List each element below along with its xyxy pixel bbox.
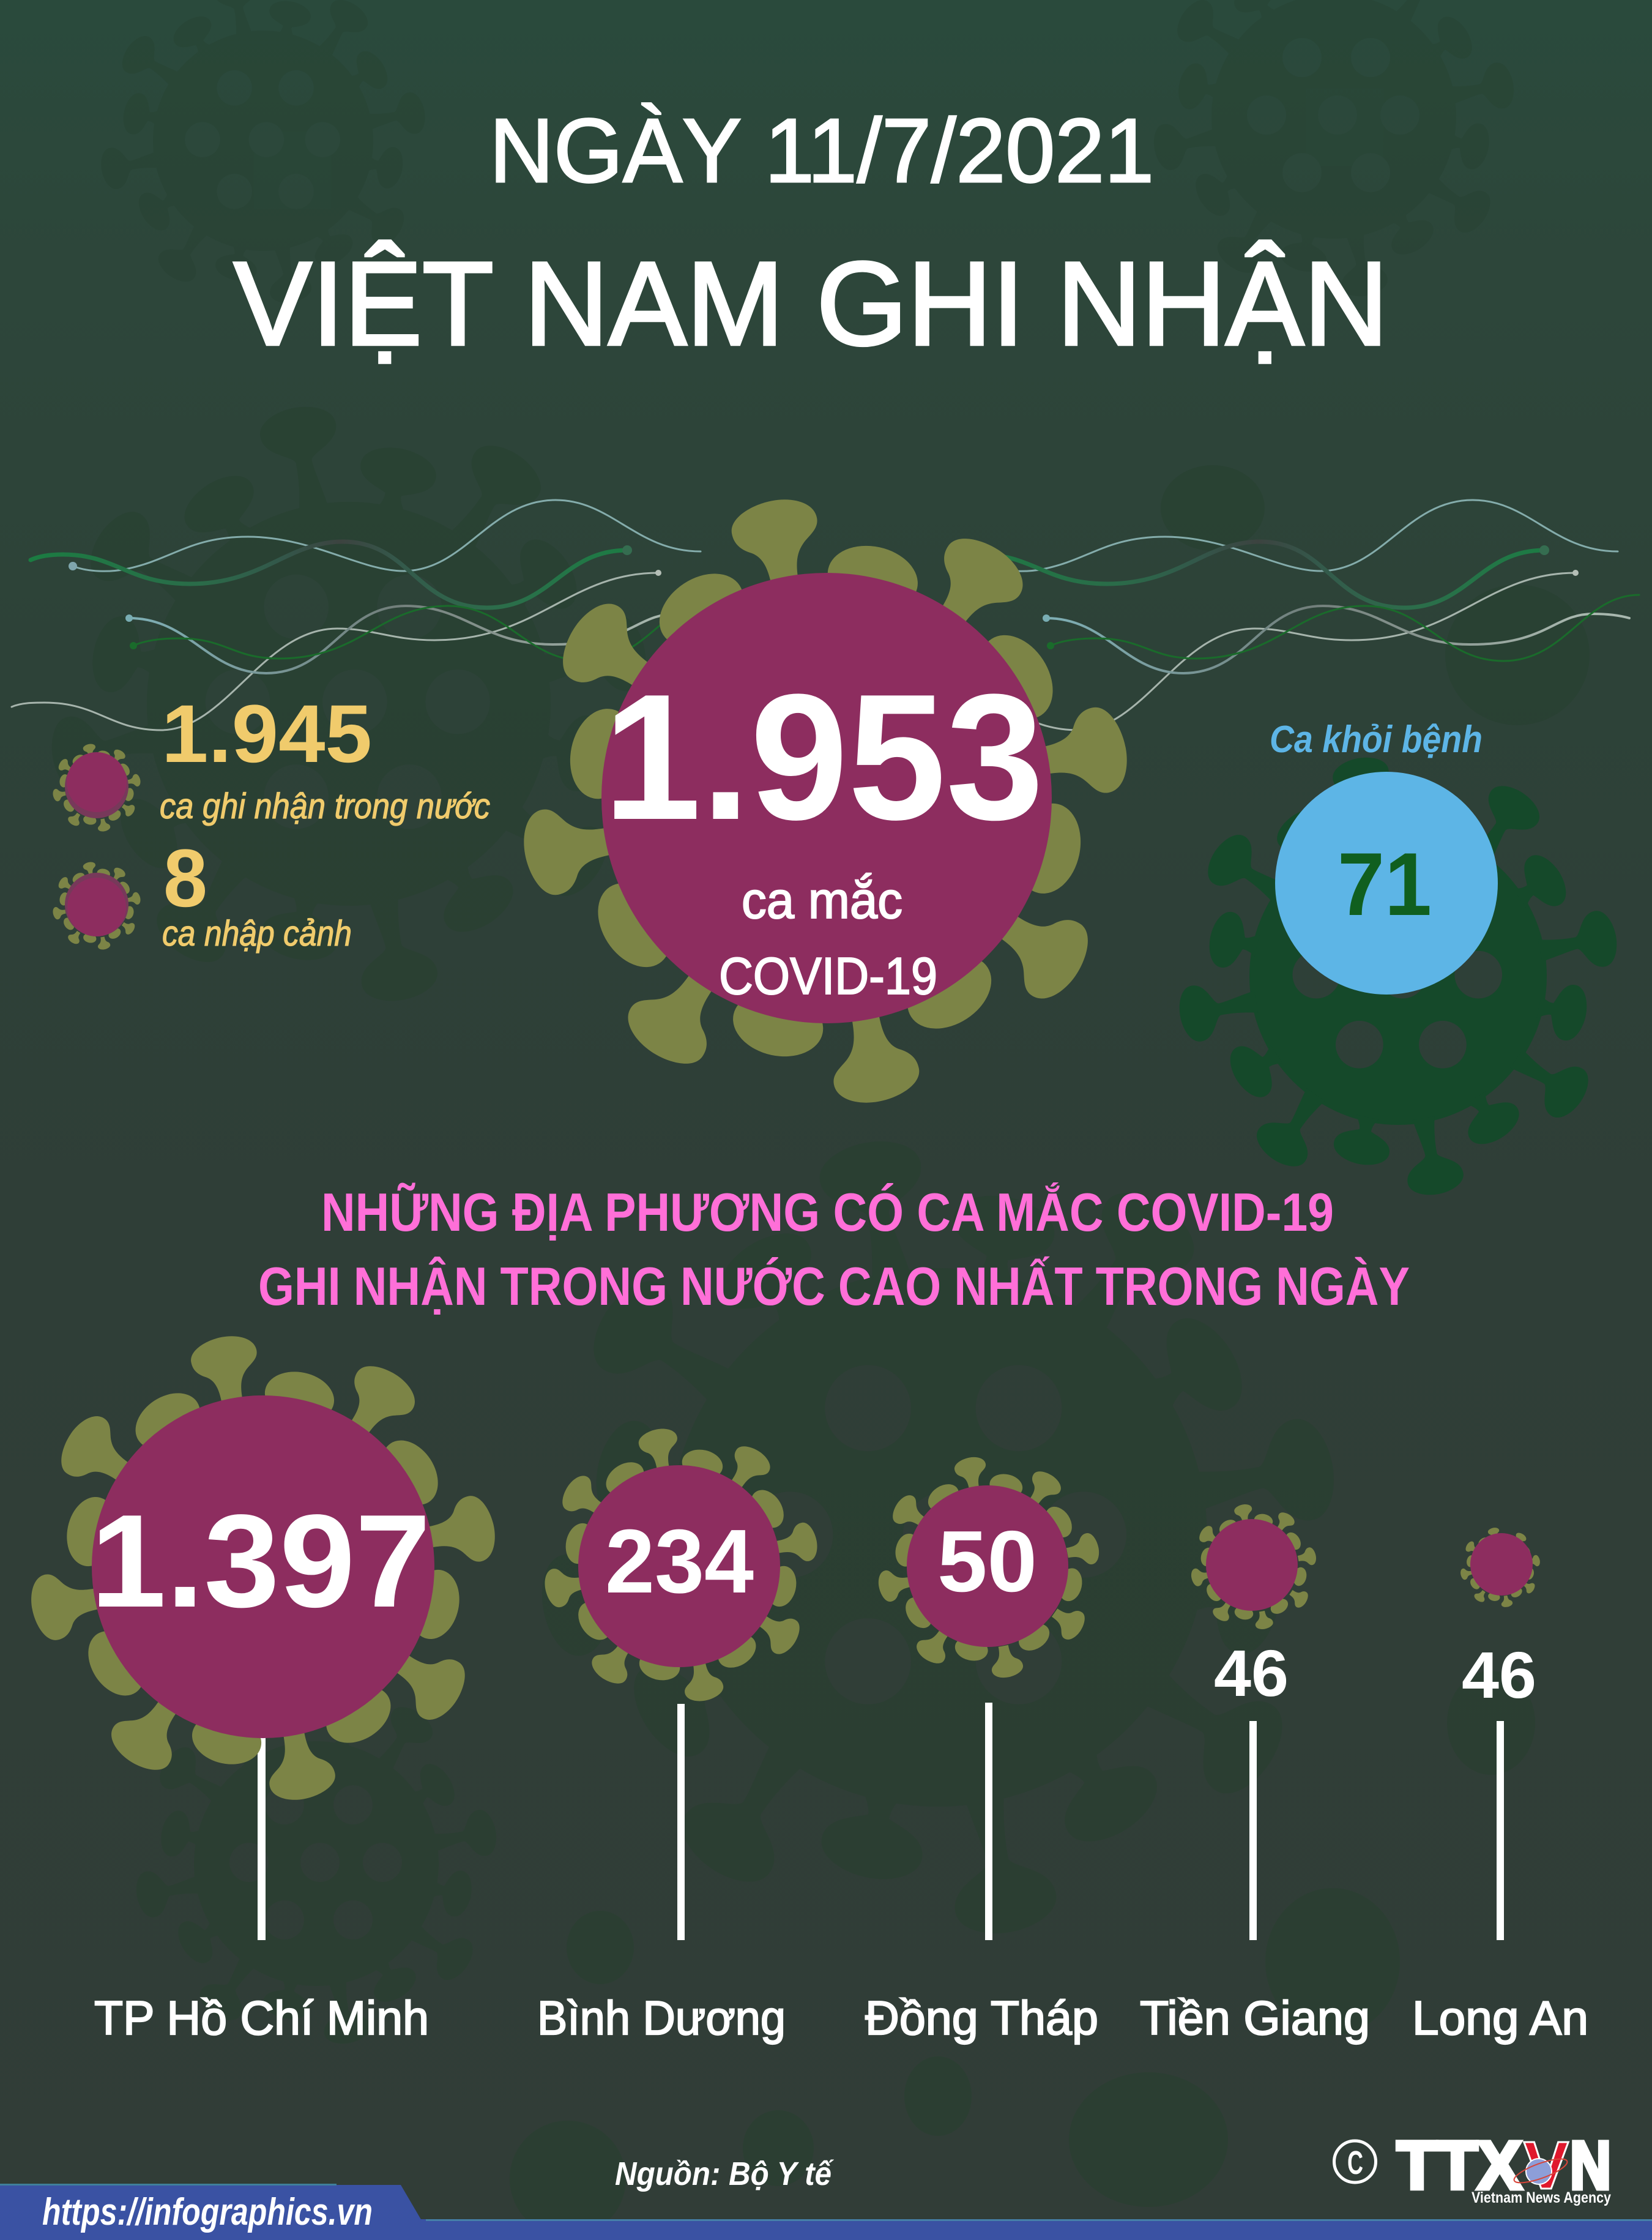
virus body xyxy=(907,1485,1068,1647)
recovered label: Ca khỏi bệnh xyxy=(1270,719,1483,761)
number 1.945: 1.945 xyxy=(162,689,372,780)
virus body xyxy=(1206,1519,1298,1611)
name: Bình Dương xyxy=(537,1991,786,2045)
globe xyxy=(1526,2159,1552,2184)
name: Tiền Giang xyxy=(1140,1991,1370,2045)
virus body xyxy=(1470,1533,1533,1596)
source note: Nguồn: Bộ Y tế xyxy=(615,2156,835,2192)
stem xyxy=(1249,1721,1257,1940)
title xyxy=(234,100,1388,370)
virus body xyxy=(578,1465,780,1667)
virus body xyxy=(92,1395,434,1738)
stem xyxy=(1497,1721,1504,1940)
agency name: Vietnam News Agency xyxy=(1472,2189,1611,2206)
stem xyxy=(677,1704,685,1940)
virus spikes xyxy=(1190,1503,1317,1630)
virus spikes xyxy=(542,1426,820,1704)
value: 234 xyxy=(605,1511,754,1612)
city: Long An xyxy=(1412,1527,1588,2045)
blue circle xyxy=(1275,772,1498,995)
value: 46 xyxy=(1462,1638,1536,1712)
name: Đồng Tháp xyxy=(865,1991,1098,2045)
virus spikes xyxy=(26,1331,500,1805)
website url: https://infographics.vn xyxy=(42,2191,373,2233)
label: ca mắc: ca mắc xyxy=(742,872,902,929)
value: 50 xyxy=(937,1513,1037,1610)
logo: TTXVN xyxy=(1397,2128,1611,2206)
value: 1.397 xyxy=(91,1487,431,1635)
city: Tiền Giang xyxy=(1140,1503,1370,2045)
panel: imported cases xyxy=(52,833,352,954)
virus spikes xyxy=(518,493,1133,1109)
wave lines left xyxy=(12,500,722,730)
icon: small virus domestic xyxy=(52,743,141,832)
panel: recovered xyxy=(1175,719,1621,1199)
panel: total cases virus xyxy=(518,493,1133,1109)
total number: 1.953 xyxy=(603,657,1044,857)
label imported: ca nhập cảnh xyxy=(162,914,352,954)
logo: TTXVN: TTX xyxy=(1397,2128,1522,2203)
panel: domestic cases xyxy=(52,689,490,832)
title line: Việt Nam ghi nhận: VIỆT NAM GHI NHẬN xyxy=(234,237,1388,370)
heading line 2: GHI NHẬN TRONG NƯỚC CAO NHẤT TRONG NGÀY xyxy=(258,1256,1410,1316)
value: 46 xyxy=(1214,1636,1289,1710)
section heading xyxy=(258,1182,1410,1316)
city: Bình Dương xyxy=(537,1426,820,2045)
footer tab xyxy=(0,2185,426,2228)
wave lines right xyxy=(929,500,1639,730)
dark green virus xyxy=(1175,753,1621,1199)
virus spikes xyxy=(876,1455,1101,1680)
heading line 1: NHỮNG ĐỊA PHƯƠNG CÓ CA MẮC COVID-19 xyxy=(321,1182,1334,1242)
virus body xyxy=(601,573,1052,1023)
recovered number: 71 xyxy=(1338,834,1432,934)
stem xyxy=(258,1732,266,1940)
stem xyxy=(985,1703,992,1940)
logo: TTXVN: V xyxy=(1524,2128,1569,2203)
logo: TTXVN: N xyxy=(1570,2128,1611,2203)
icon: small virus imported xyxy=(52,861,141,950)
virus spikes xyxy=(1460,1527,1541,1608)
icon: copyright: C xyxy=(1347,2145,1363,2181)
label: COVID-19: COVID-19 xyxy=(719,947,937,1006)
footer bar xyxy=(0,2184,1652,2240)
name: TP Hồ Chí Minh xyxy=(94,1991,429,2045)
number 8: 8 xyxy=(163,833,207,924)
name: Long An xyxy=(1412,1991,1588,2045)
city: TP Hồ Chí Minh xyxy=(26,1331,500,2045)
city: Đồng Tháp xyxy=(865,1455,1101,2045)
title line: date: NGÀY 11/7/2021 xyxy=(489,100,1154,201)
label domestic: ca ghi nhận trong nước xyxy=(160,786,490,826)
icon: copyright xyxy=(1334,2141,1375,2182)
